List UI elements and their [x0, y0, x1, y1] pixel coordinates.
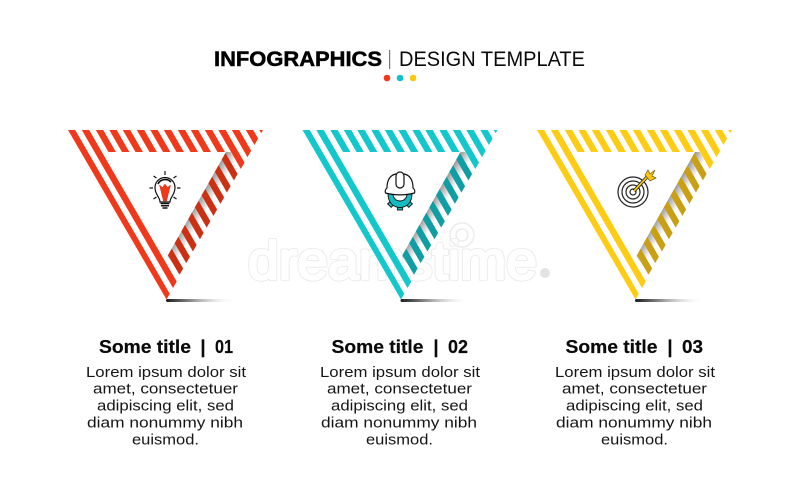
text block 2: adipiscing elit, sed — [331, 398, 468, 414]
panel: triangle 2 teal — [302, 130, 498, 302]
text block 2: diam nonummy nibh — [321, 414, 477, 432]
icon: helmet with gear — [385, 172, 415, 210]
text block 2: euismod. — [366, 432, 433, 448]
text block 1: euismod. — [132, 432, 199, 448]
text block 2 — [320, 336, 481, 448]
heading 3: Some title — [566, 336, 658, 357]
icon: target with arrow — [618, 170, 656, 207]
heading 3: | — [667, 336, 673, 357]
text block 1 — [86, 336, 247, 448]
heading 2 — [332, 336, 468, 357]
text block 1: adipiscing elit, sed — [97, 398, 234, 414]
heading 2: | — [433, 336, 439, 357]
heading 2: Some title — [332, 336, 424, 357]
watermark: dreamstime — [248, 231, 537, 291]
heading 1: Some title — [99, 336, 191, 357]
heading 1 — [99, 336, 233, 357]
watermark: dreamstime — [248, 231, 537, 291]
heading 2: 02 — [448, 336, 468, 357]
text block 1: diam nonummy nibh — [87, 414, 243, 432]
title: INFOGRAPHICS — [214, 48, 382, 71]
text block 3: Lorem ipsum dolor sit — [555, 364, 716, 381]
text block 3: amet, consectetuer — [562, 380, 707, 398]
heading 1: | — [200, 336, 206, 357]
text block 3 — [555, 336, 716, 448]
panel: triangle 3 yellow — [537, 130, 732, 302]
text block 1: amet, consectetuer — [93, 380, 238, 398]
title — [214, 47, 585, 71]
text block 1: Lorem ipsum dolor sit — [86, 364, 247, 381]
text block 3: adipiscing elit, sed — [566, 398, 703, 414]
heading 3: 03 — [682, 336, 703, 357]
text block 2: amet, consectetuer — [327, 380, 472, 398]
text block 3: euismod. — [601, 432, 668, 448]
panel: triangle 1 red — [68, 130, 263, 302]
text block 3: diam nonummy nibh — [556, 414, 712, 432]
title: DESIGN TEMPLATE — [399, 47, 585, 71]
icon: light bulb — [150, 171, 180, 208]
title dots — [384, 75, 416, 81]
text block 2: Lorem ipsum dolor sit — [320, 364, 481, 381]
heading 3 — [566, 336, 703, 357]
heading 1: 01 — [215, 336, 233, 357]
